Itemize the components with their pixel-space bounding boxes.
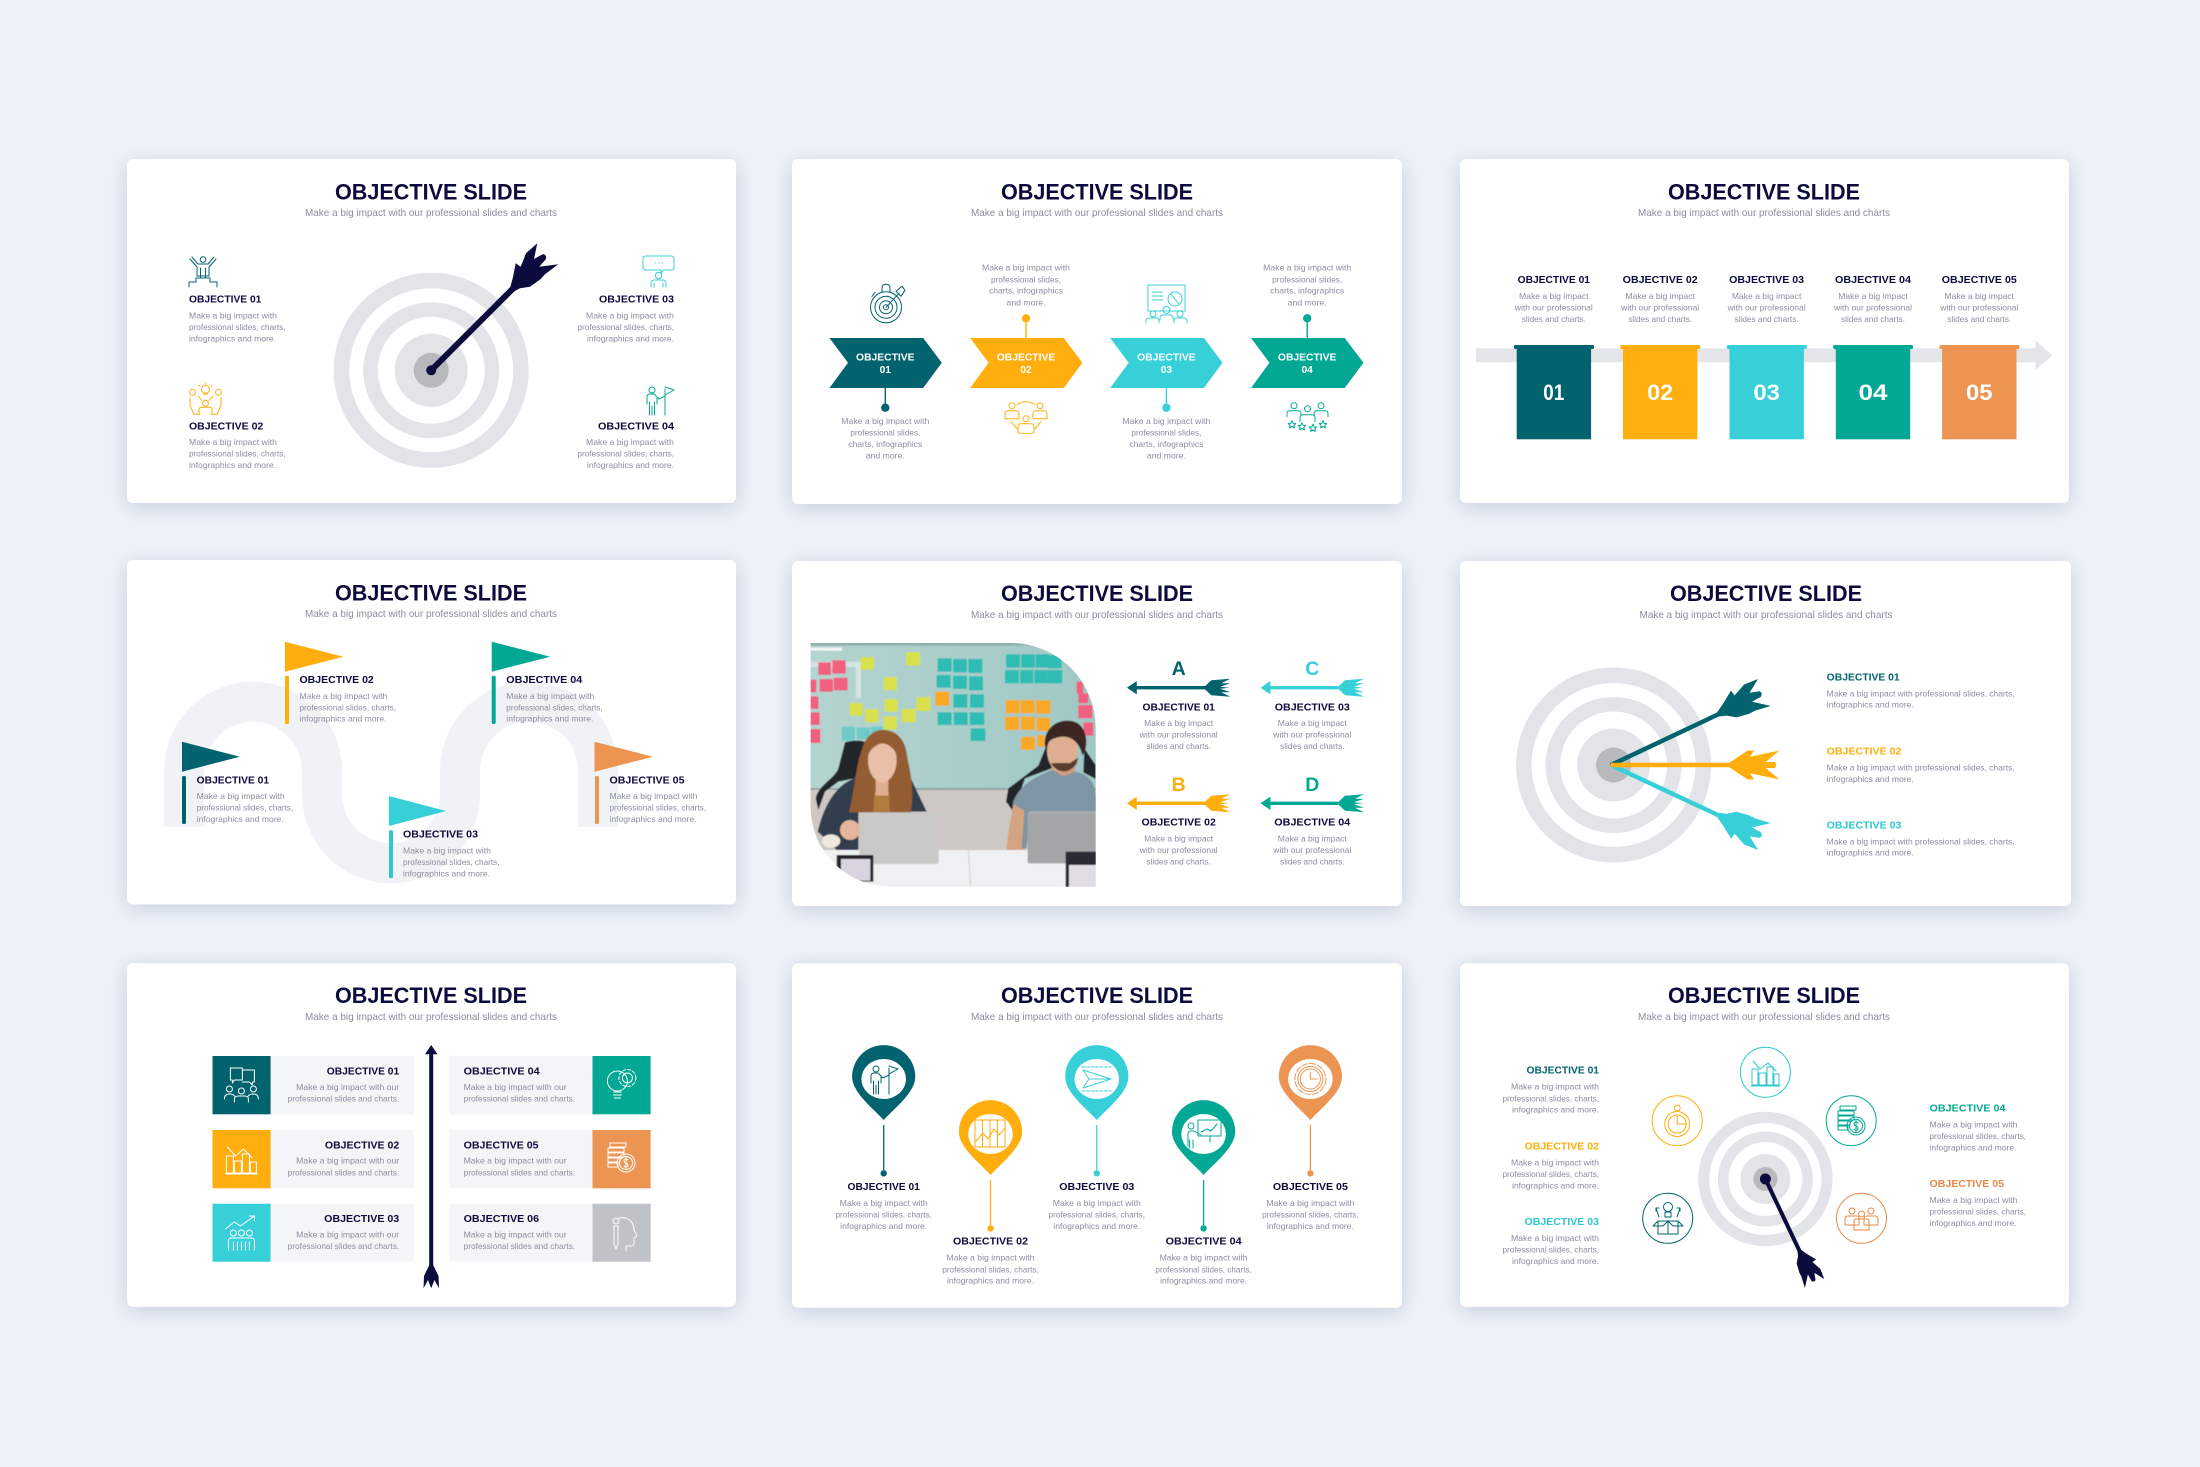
text block: objective 05: professional slides, charts, xyxy=(1930,1208,2026,1217)
row: objective 05: Make a big impact with our xyxy=(464,1157,567,1166)
arrow C with objective 03: Make a big impact xyxy=(1278,719,1348,728)
text block: objective 01: professional slides, charts, xyxy=(1502,1094,1599,1103)
step 01: with our professional xyxy=(1514,304,1593,313)
text block: objective 01 xyxy=(189,295,286,343)
text block 02: and more. xyxy=(1006,298,1046,307)
title: OBJECTIVE SLIDE xyxy=(335,983,527,1008)
chevron: objective 01 xyxy=(830,338,942,388)
target rings xyxy=(334,273,529,468)
row: objective 06: professional slides and charts. xyxy=(464,1242,575,1251)
row: objective 03 xyxy=(212,1204,414,1262)
text block 04 xyxy=(1263,264,1352,307)
text block 02 xyxy=(982,264,1070,307)
arrow A with objective 01: Make a big impact xyxy=(1144,719,1214,728)
panel: winding road with flags xyxy=(127,560,736,904)
flag 05: Make a big impact with xyxy=(610,792,698,801)
icon: person arms raised xyxy=(189,257,217,287)
subtitle: Make a big impact with our professional slides and charts xyxy=(1638,1011,1890,1023)
flag 01: professional slides, charts, xyxy=(197,804,293,813)
vertical arrow xyxy=(424,1045,439,1288)
row: objective 06: Make a big impact with our xyxy=(464,1230,567,1239)
pin 05: Make a big impact with xyxy=(1266,1199,1355,1208)
subtitle: Make a big impact with our professional slides and charts xyxy=(305,207,557,219)
row: objective 03: OBJECTIVE 03 xyxy=(324,1214,400,1225)
step 04: OBJECTIVE 04 xyxy=(1835,275,1911,286)
flag 02: professional slides, charts, xyxy=(300,703,396,712)
subtitle: Make a big impact with our professional slides and charts xyxy=(1638,207,1890,219)
arrow D with objective 04: slides and charts. xyxy=(1280,858,1345,867)
text block: objective 04: professional slides, charts, xyxy=(578,450,674,459)
step 02: OBJECTIVE 02 xyxy=(1623,275,1698,286)
step 03: Make a big impact xyxy=(1732,292,1802,301)
row: objective 03: professional slides and charts. xyxy=(288,1242,399,1251)
text block: objective 03 xyxy=(578,295,674,343)
flag 05 xyxy=(594,742,706,824)
text block 04: charts, infographics xyxy=(1270,287,1344,296)
text block: objective 02: professional slides, charts, xyxy=(189,450,286,459)
text block: objective 03: Make a big impact with professional slides, charts, xyxy=(1827,837,2015,846)
icon: idea group xyxy=(190,383,222,414)
arrow A with objective 01: A xyxy=(1172,658,1186,680)
pin 02: infographics and more. xyxy=(947,1277,1034,1286)
row: objective 04: Make a big impact with our xyxy=(464,1083,567,1092)
step 01: 01 xyxy=(1543,380,1564,405)
text block: objective 03: OBJECTIVE 03 xyxy=(599,295,674,306)
text block: objective 01: OBJECTIVE 01 xyxy=(1827,673,1900,684)
arrow C with objective 03: with our professional xyxy=(1272,731,1351,740)
step 02: with our professional xyxy=(1620,304,1699,313)
text block: objective 04: Make a big impact with xyxy=(586,438,674,447)
icon: team with stars xyxy=(1287,403,1328,431)
text block 01 xyxy=(841,417,930,461)
title: OBJECTIVE SLIDE xyxy=(335,180,527,204)
arrow B with objective 02 xyxy=(1127,774,1230,867)
pin 01: Make a big impact with xyxy=(840,1199,928,1208)
arrow A with objective 01: slides and charts. xyxy=(1146,742,1211,751)
pin 05: OBJECTIVE 05 xyxy=(1273,1182,1348,1193)
step 01: Make a big impact xyxy=(1519,292,1589,301)
text block: objective 05 xyxy=(1930,1179,2026,1228)
chevron: objective 03: OBJECTIVE xyxy=(1137,353,1196,364)
arrow teal xyxy=(1611,670,1778,765)
row: objective 01 xyxy=(212,1056,414,1114)
text block: objective 04 xyxy=(578,422,674,470)
text block 01: and more. xyxy=(866,452,905,461)
arrow B with objective 02: Make a big impact xyxy=(1144,835,1214,844)
pin 04 xyxy=(1155,1100,1252,1286)
text block: objective 02: OBJECTIVE 02 xyxy=(189,422,264,433)
text block 03: and more. xyxy=(1147,452,1186,461)
pin 02: professional slides, charts, xyxy=(942,1265,1039,1274)
step 04: with our professional xyxy=(1833,304,1912,313)
row: objective 02: OBJECTIVE 02 xyxy=(325,1140,400,1151)
flag 01: OBJECTIVE 01 xyxy=(197,775,270,786)
text block 04: and more. xyxy=(1288,298,1327,307)
arrow C with objective 03: C xyxy=(1305,658,1319,680)
step 03 xyxy=(1727,275,1807,439)
text block: objective 05: infographics and more. xyxy=(1930,1219,2016,1228)
text block: objective 03: Make a big impact with xyxy=(1511,1234,1599,1243)
chevron: objective 04 xyxy=(1251,338,1364,388)
pin 01: infographics and more. xyxy=(840,1222,927,1231)
text block: objective 02: OBJECTIVE 02 xyxy=(1524,1141,1599,1152)
row: objective 02: professional slides and charts. xyxy=(288,1168,399,1177)
pin 01: professional slides, charts, xyxy=(835,1210,932,1219)
connector 03 xyxy=(1162,388,1171,412)
pin 03: OBJECTIVE 03 xyxy=(1059,1182,1135,1193)
target rings xyxy=(1698,1112,1833,1246)
flag 04 xyxy=(492,642,603,724)
step 03: slides and charts. xyxy=(1735,315,1799,324)
step 02: Make a big impact xyxy=(1625,292,1696,301)
row: objective 06: OBJECTIVE 06 xyxy=(464,1214,540,1225)
text block: objective 04: infographics and more. xyxy=(587,461,674,470)
flag 02: infographics and more. xyxy=(300,715,386,724)
text block: objective 01: OBJECTIVE 01 xyxy=(1526,1066,1599,1077)
flag 03: professional slides, charts, xyxy=(403,858,500,867)
row: objective 02: Make a big impact with our xyxy=(296,1157,399,1166)
step 01: OBJECTIVE 01 xyxy=(1518,275,1590,286)
icon: person with flag xyxy=(647,387,674,415)
text block: objective 02 xyxy=(1502,1141,1599,1190)
pin 03: Make a big impact with xyxy=(1053,1199,1141,1208)
arrow A with objective 01: OBJECTIVE 01 xyxy=(1142,702,1215,713)
title: OBJECTIVE SLIDE xyxy=(1670,581,1862,606)
step 03: OBJECTIVE 03 xyxy=(1729,275,1805,286)
flag 05: infographics and more. xyxy=(610,815,696,824)
text block 02: professional slides, xyxy=(991,275,1061,284)
step 02 xyxy=(1620,275,1700,439)
text block: objective 03 xyxy=(1827,820,2015,858)
text block 01: professional slides, xyxy=(850,429,920,438)
text block: objective 01: infographics and more. xyxy=(189,334,276,343)
text block: objective 04: Make a big impact with xyxy=(1930,1120,2018,1129)
icon: stopwatch target xyxy=(870,284,905,323)
pin 04: professional slides, charts, xyxy=(1155,1265,1252,1274)
flag 01 xyxy=(182,742,293,824)
connector 02 xyxy=(1022,314,1030,338)
arrow B with objective 02: B xyxy=(1172,774,1186,796)
arrow C with objective 03: slides and charts. xyxy=(1280,742,1345,751)
arrow D with objective 04 xyxy=(1260,774,1364,867)
flag 02: Make a big impact with xyxy=(300,692,388,701)
row: objective 05: professional slides and charts. xyxy=(464,1168,575,1177)
text block: objective 03: professional slides, charts, xyxy=(1502,1245,1599,1254)
flag 04: OBJECTIVE 04 xyxy=(506,675,583,686)
pin 03 xyxy=(1049,1045,1145,1231)
text block: objective 02: infographics and more. xyxy=(1827,775,1914,784)
step 04: 04 xyxy=(1858,380,1888,405)
row: objective 01: professional slides and charts. xyxy=(288,1094,399,1103)
arrow amber xyxy=(1611,750,1779,780)
panel: target with circled icons xyxy=(1460,963,2069,1307)
subtitle: Make a big impact with our professional slides and charts xyxy=(971,207,1223,219)
step 05: slides and charts. xyxy=(1947,315,2011,324)
title: OBJECTIVE SLIDE xyxy=(1668,983,1860,1008)
chevron: objective 01: OBJECTIVE xyxy=(856,353,915,364)
step 04: Make a big impact xyxy=(1838,292,1908,301)
text block: objective 02 xyxy=(1827,747,2015,784)
step 05 xyxy=(1939,275,2019,439)
text block: objective 05: Make a big impact with xyxy=(1930,1196,2018,1205)
text block: objective 03: infographics and more. xyxy=(1512,1257,1599,1266)
pin 03: professional slides, charts, xyxy=(1049,1210,1145,1219)
pin 05 xyxy=(1262,1045,1359,1231)
panel: vertical arrow with six objectives xyxy=(127,963,736,1307)
chevron: objective 04: 04 xyxy=(1302,365,1313,376)
step 01: slides and charts. xyxy=(1522,315,1586,324)
icon: team circle xyxy=(1005,402,1047,434)
chevron: objective 02: 02 xyxy=(1020,365,1032,376)
flag 05: professional slides, charts, xyxy=(610,804,706,813)
flag 03: infographics and more. xyxy=(403,869,490,878)
text block: objective 02: infographics and more. xyxy=(189,461,276,470)
text block: objective 04: OBJECTIVE 04 xyxy=(1930,1103,2006,1114)
icon circle: chart xyxy=(1740,1047,1790,1097)
arrow C with objective 03: OBJECTIVE 03 xyxy=(1275,702,1350,713)
icon circle: stopwatch xyxy=(1652,1096,1702,1146)
title: OBJECTIVE SLIDE xyxy=(1001,581,1193,606)
subtitle: Make a big impact with our professional slides and charts xyxy=(971,609,1223,621)
subtitle: Make a big impact with our professional slides and charts xyxy=(971,1011,1223,1023)
step 01 xyxy=(1514,275,1594,439)
text block: objective 01: infographics and more. xyxy=(1512,1106,1599,1115)
pin 02: OBJECTIVE 02 xyxy=(953,1237,1028,1248)
text block: objective 02: infographics and more. xyxy=(1512,1181,1599,1190)
title: OBJECTIVE SLIDE xyxy=(335,580,527,606)
chevron: objective 01: 01 xyxy=(880,365,891,376)
text block: objective 03: professional slides, charts, xyxy=(578,323,674,332)
text block: objective 02: Make a big impact with professional slides, charts, xyxy=(1827,763,2015,772)
pin 02 xyxy=(942,1100,1039,1286)
flag 01: infographics and more. xyxy=(197,815,284,824)
flag 04: infographics and more. xyxy=(506,715,593,724)
row: objective 03: Make a big impact with our xyxy=(296,1230,399,1239)
panel: target with one arrow and four objectives xyxy=(127,159,736,503)
row: objective 02 xyxy=(212,1130,414,1188)
flag 03: Make a big impact with xyxy=(403,847,491,856)
icon: speech person xyxy=(643,256,674,287)
arrow C with objective 03 xyxy=(1260,658,1364,751)
text block 02: Make a big impact with xyxy=(982,264,1070,273)
pin 01 xyxy=(835,1045,932,1231)
step 05: 05 xyxy=(1966,380,1993,405)
icon circle: team xyxy=(1836,1193,1886,1243)
row: objective 04 xyxy=(449,1056,651,1114)
step 03: 03 xyxy=(1753,380,1780,405)
row: objective 05: OBJECTIVE 05 xyxy=(464,1140,539,1151)
subtitle: Make a big impact with our professional slides and charts xyxy=(1640,609,1892,621)
pin 04: Make a big impact with xyxy=(1160,1254,1248,1263)
chevron: objective 03 xyxy=(1110,338,1222,388)
step 05: OBJECTIVE 05 xyxy=(1942,275,2017,286)
pin 02: Make a big impact with xyxy=(946,1254,1035,1263)
text block: objective 02: Make a big impact with xyxy=(1511,1158,1599,1167)
flag 02: OBJECTIVE 02 xyxy=(300,675,374,686)
row: objective 01: OBJECTIVE 01 xyxy=(327,1066,400,1077)
arrow D with objective 04: OBJECTIVE 04 xyxy=(1274,818,1351,829)
row: objective 04: professional slides and charts. xyxy=(464,1094,575,1103)
icon circle: coins xyxy=(1826,1096,1876,1146)
panel: location pins xyxy=(792,963,1402,1308)
row: objective 04: OBJECTIVE 04 xyxy=(464,1066,540,1077)
arrow in target xyxy=(426,243,558,375)
text block: objective 01: Make a big impact with professional slides, charts, xyxy=(1827,689,2015,698)
chevron: objective 02: OBJECTIVE xyxy=(997,353,1055,364)
text block: objective 02: Make a big impact with xyxy=(189,438,277,447)
arrow B with objective 02: with our professional xyxy=(1139,846,1218,855)
title: OBJECTIVE SLIDE xyxy=(1001,983,1193,1008)
pin 05: infographics and more. xyxy=(1267,1222,1354,1231)
text block: objective 02 xyxy=(189,422,286,470)
arrow in target xyxy=(1760,1174,1831,1293)
flag 04: Make a big impact with xyxy=(506,692,595,701)
text block 03: Make a big impact with xyxy=(1122,417,1211,426)
winding road xyxy=(184,702,598,863)
step 05: Make a big impact xyxy=(1945,292,2015,301)
text block 03 xyxy=(1122,417,1211,461)
text block: objective 04: OBJECTIVE 04 xyxy=(598,422,674,433)
text block: objective 04: infographics and more. xyxy=(1930,1143,2016,1152)
panel: chevron process xyxy=(792,159,1402,504)
text block: objective 03: infographics and more. xyxy=(587,334,674,343)
target rings xyxy=(1516,668,1711,862)
text block: objective 01: Make a big impact with xyxy=(189,311,277,320)
arrow D with objective 04: with our professional xyxy=(1272,846,1351,855)
text block: objective 03: OBJECTIVE 03 xyxy=(1827,820,1902,831)
arrow A with objective 01: with our professional xyxy=(1139,731,1218,740)
text block 01: Make a big impact with xyxy=(841,417,930,426)
text block: objective 03: OBJECTIVE 03 xyxy=(1524,1217,1599,1228)
text block: objective 03: Make a big impact with xyxy=(586,311,674,320)
text block: objective 01 xyxy=(1502,1066,1599,1115)
flag 01: Make a big impact with xyxy=(197,792,285,801)
arrow D with objective 04: Make a big impact xyxy=(1278,835,1348,844)
chevron: objective 02 xyxy=(970,338,1082,388)
pin 01: OBJECTIVE 01 xyxy=(848,1182,920,1193)
step 04: slides and charts. xyxy=(1841,315,1905,324)
arrow D with objective 04: D xyxy=(1305,774,1319,796)
text block: objective 03 xyxy=(1502,1217,1599,1266)
title: OBJECTIVE SLIDE xyxy=(1668,180,1860,204)
pin 03: infographics and more. xyxy=(1053,1222,1140,1231)
arrow A with objective 01 xyxy=(1127,658,1230,751)
chevron: objective 03: 03 xyxy=(1161,365,1172,376)
pin 04: infographics and more. xyxy=(1160,1277,1247,1286)
connector 01 xyxy=(881,388,890,412)
flag 03 xyxy=(389,796,500,878)
text block 03: charts, infographics xyxy=(1129,440,1203,449)
subtitle: Make a big impact with our professional slides and charts xyxy=(305,608,557,620)
connector 04 xyxy=(1303,314,1311,338)
panel: photo with arrows xyxy=(792,561,1402,906)
flag 05: OBJECTIVE 05 xyxy=(610,775,685,786)
text block: objective 04: professional slides, charts, xyxy=(1930,1132,2026,1141)
text block 01: charts, infographics xyxy=(848,440,922,449)
pin 05: professional slides, charts, xyxy=(1262,1210,1359,1219)
row: objective 05 xyxy=(449,1130,651,1188)
text block: objective 03: infographics and more. xyxy=(1827,849,1914,858)
text block: objective 02: professional slides, charts, xyxy=(1502,1170,1599,1179)
step 03: with our professional xyxy=(1727,304,1806,313)
text block 04: Make a big impact with xyxy=(1263,264,1352,273)
arrow B with objective 02: slides and charts. xyxy=(1146,858,1211,867)
text block: objective 01: Make a big impact with xyxy=(1511,1083,1599,1092)
step 02: slides and charts. xyxy=(1628,315,1692,324)
subtitle: Make a big impact with our professional slides and charts xyxy=(305,1011,557,1023)
flag 04: professional slides, charts, xyxy=(506,703,603,712)
text block: objective 01 xyxy=(1827,673,2015,710)
text block 03: professional slides, xyxy=(1131,429,1201,438)
timeline arrow xyxy=(1476,340,2052,370)
chevron: objective 04: OBJECTIVE xyxy=(1278,353,1337,364)
text block: objective 01: OBJECTIVE 01 xyxy=(189,295,262,306)
arrow cyan xyxy=(1611,765,1778,859)
flag 03: OBJECTIVE 03 xyxy=(403,830,478,841)
text block: objective 01: professional slides, charts, xyxy=(189,323,286,332)
step 04 xyxy=(1833,275,1913,439)
step 02: 02 xyxy=(1647,380,1673,405)
panel: timeline tabs xyxy=(1460,159,2069,503)
icon circle: idea box xyxy=(1643,1193,1693,1243)
text block: objective 01: infographics and more. xyxy=(1827,701,1914,710)
text block: objective 05: OBJECTIVE 05 xyxy=(1930,1179,2004,1190)
text block: objective 02: OBJECTIVE 02 xyxy=(1827,747,1902,758)
text block: objective 04 xyxy=(1930,1103,2026,1152)
pin 04: OBJECTIVE 04 xyxy=(1166,1237,1242,1248)
icon: presentation xyxy=(1146,285,1187,323)
step 05: with our professional xyxy=(1939,304,2018,313)
row: objective 01: Make a big impact with our xyxy=(296,1083,399,1092)
flag 02 xyxy=(285,642,396,724)
arrow B with objective 02: OBJECTIVE 02 xyxy=(1142,818,1216,829)
text block 04: professional slides, xyxy=(1272,275,1342,284)
panel: target with three arrows xyxy=(1460,561,2071,906)
photo: team at sticky-note wall xyxy=(805,642,1098,888)
row: objective 06 xyxy=(449,1204,651,1262)
title: OBJECTIVE SLIDE xyxy=(1001,180,1193,204)
text block 02: charts, infographics xyxy=(989,287,1063,296)
